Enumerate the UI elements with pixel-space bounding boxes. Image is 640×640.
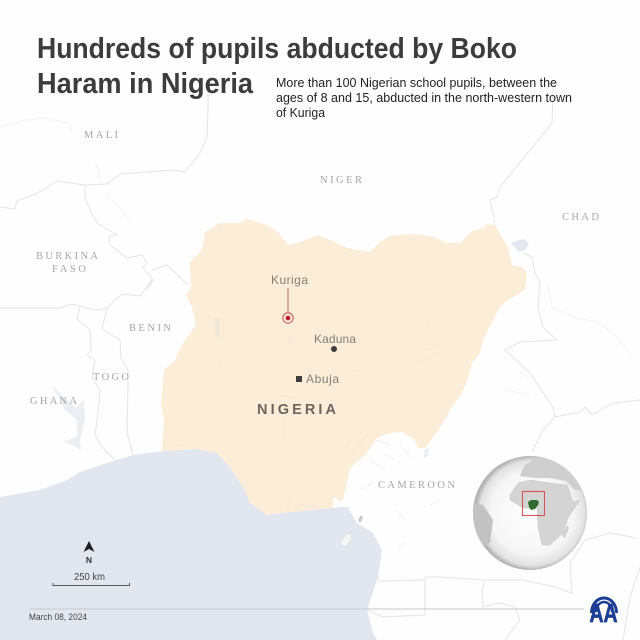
land: Europe and Asia [520,458,582,490]
country labels: NIGER [320,175,362,186]
lake: Chad [511,239,529,252]
subtitle [276,76,572,120]
country labels: CHAD [562,212,599,223]
icon: north arrow [84,541,94,565]
locator globe [470,456,590,570]
subtitle: of Kuriga [276,106,325,120]
label: Nigeria: NIGERIA [257,402,337,418]
logo: Anadolu Agency: AA [590,598,618,628]
country labels: CAMEROON [378,480,455,491]
title: Haram in Nigeria [37,68,254,100]
subtitle: More than 100 Nigerian school pupils, between the [276,76,557,90]
land: Madagascar [562,525,569,538]
lake: Volta [52,385,85,450]
sea: Gulf of Guinea [0,449,382,640]
country labels: BENIN [129,323,171,334]
island: Bioko [340,533,352,547]
title [37,33,517,100]
marker: Abuja: Abuja [306,372,339,386]
country labels: MALI [84,130,118,141]
texture: Cameroon highlands [358,372,530,550]
title: Hundreds of pupils abducted by Boko [37,33,517,65]
scale bar [53,571,130,586]
country labels: FASO [52,264,86,275]
date: March 08, 2024 [29,612,87,623]
icon: north arrow: N [86,555,92,565]
locator box [522,492,544,516]
footer rule [29,608,584,610]
marker: Kaduna: Kaduna [314,332,356,346]
country labels: BURKINA [36,251,98,262]
land: Nigeria [528,500,539,510]
country labels: TOGO [93,372,129,383]
marker: Kuriga: Kuriga [271,273,308,287]
land: Africa [510,480,580,545]
subtitle: ages of 8 and 15, abducted in the north-western town [276,91,572,105]
marker: Kuriga [271,273,308,323]
country labels [30,130,599,491]
panel: Nigeria [161,219,527,515]
scale bar: 250 km [74,571,105,583]
land: South America [473,504,493,545]
marker: Kaduna [314,332,356,352]
country labels: GHANA [30,396,77,407]
